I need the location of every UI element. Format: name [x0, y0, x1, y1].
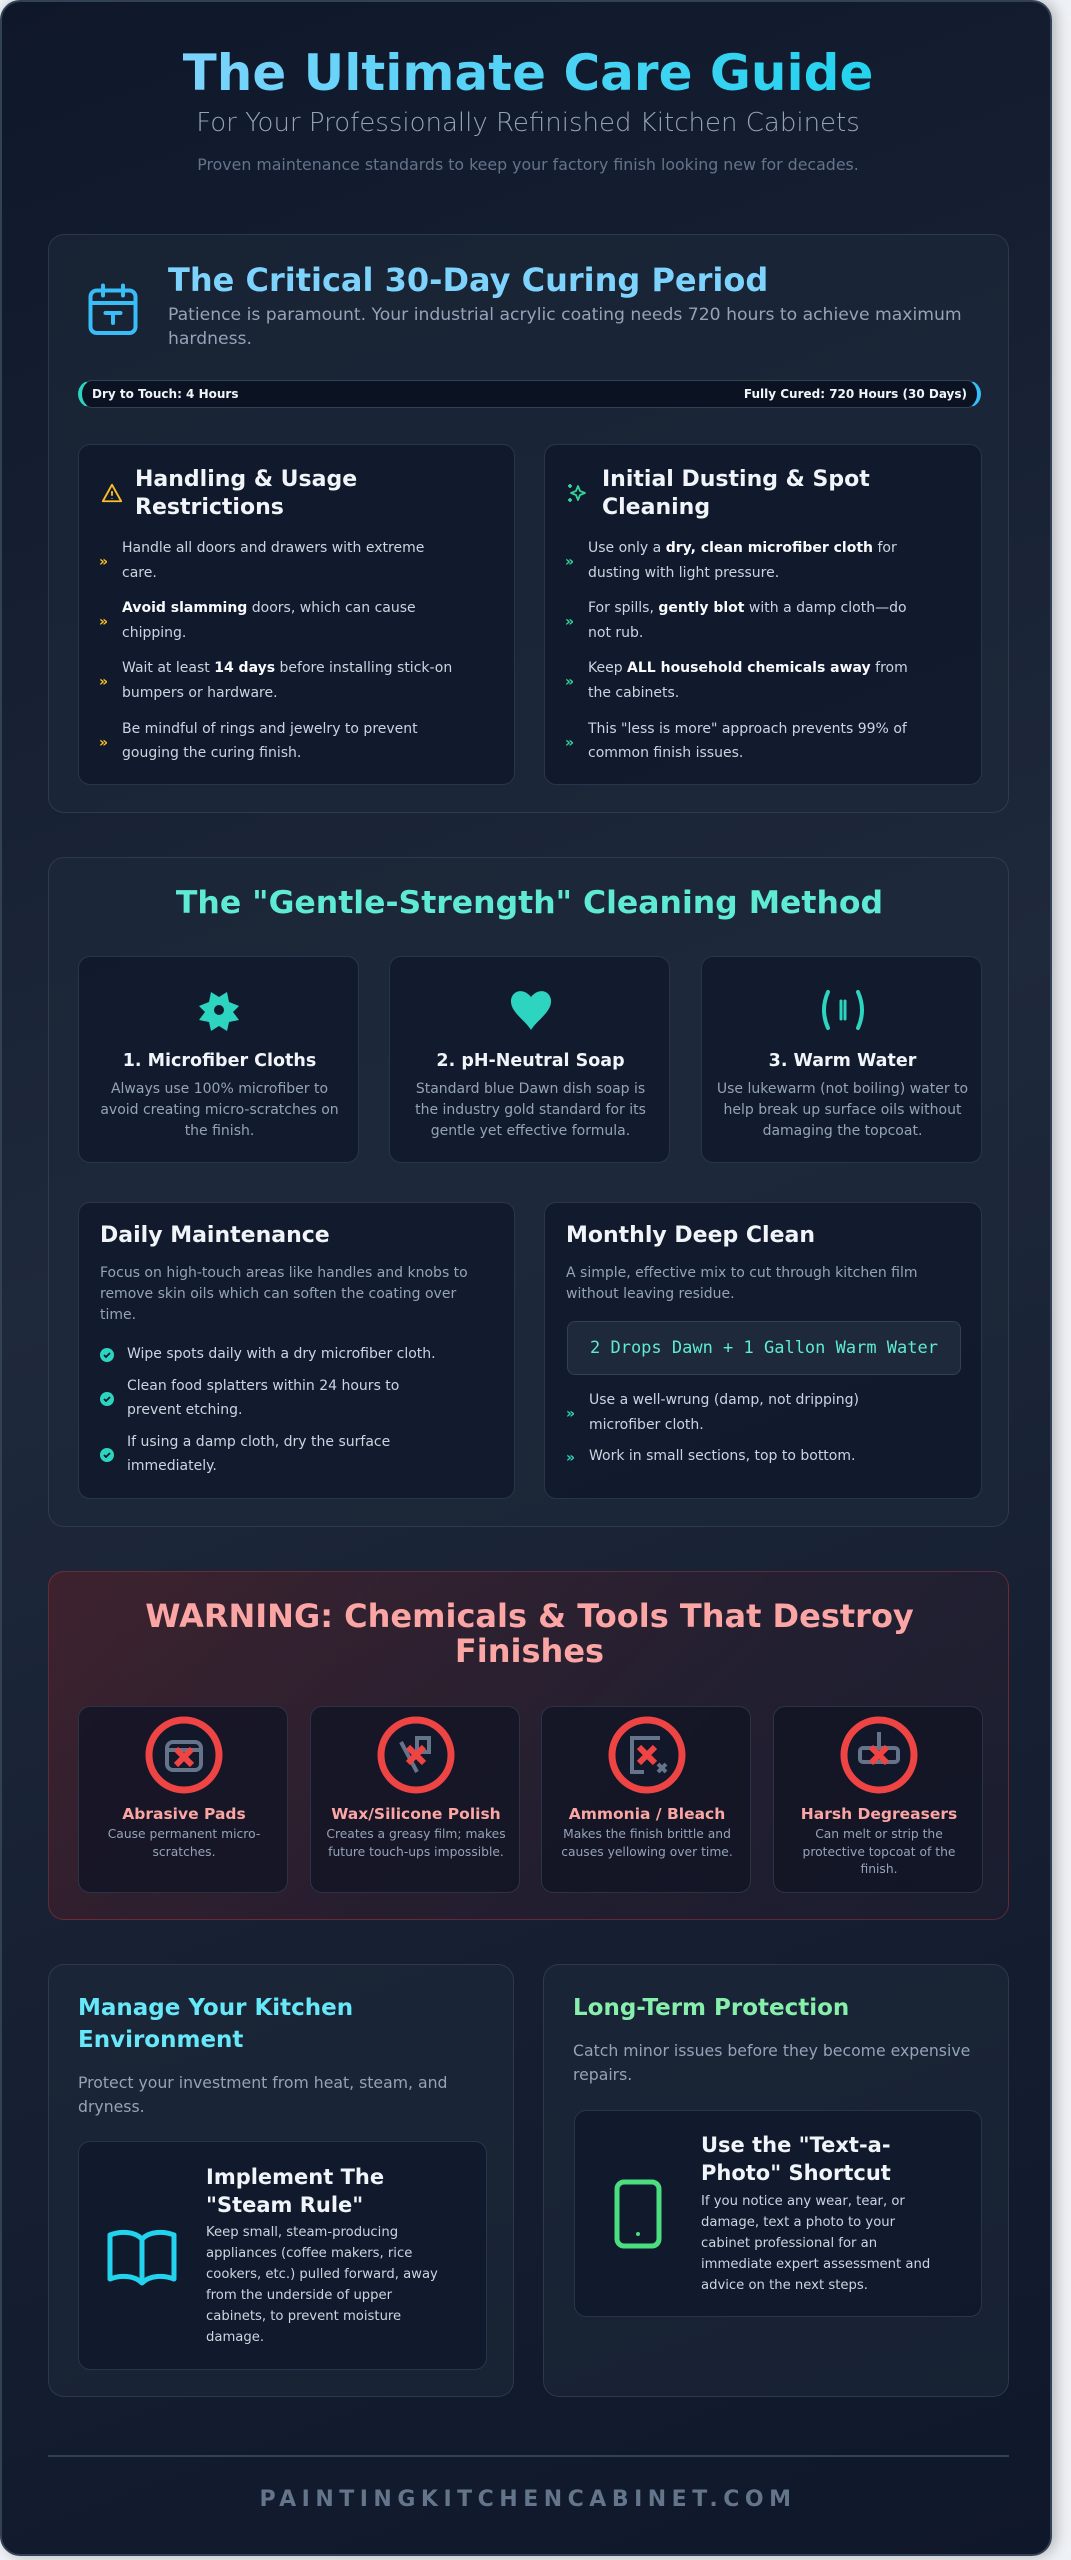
description [701, 2194, 930, 2293]
description: from the underside of upper [206, 2288, 392, 2303]
description: If you notice any wear, tear, or [701, 2194, 905, 2209]
bullet list: » [99, 735, 108, 751]
bullet list: microfiber cloth. [589, 1416, 704, 1432]
heading [135, 467, 357, 520]
title: 3. Warm Water [769, 1051, 916, 1071]
heading: The Critical 30-Day Curing Period [168, 261, 768, 299]
bullet list: bumpers or hardware. [122, 685, 278, 701]
description: damage, text a photo to your [701, 2215, 895, 2230]
checklist: prevent etching. [127, 1402, 242, 1418]
card: abrasive pads [78, 1706, 288, 1893]
heading: WARNING: Chemicals & Tools That Destroy [145, 1597, 914, 1635]
icon: sparkle [568, 484, 586, 502]
card: water [701, 956, 982, 1163]
icon: calendar [88, 284, 138, 335]
description: immediate expert assessment and [701, 2257, 930, 2272]
description: time. [100, 1307, 136, 1323]
checklist: If using a damp cloth, dry the surface [127, 1434, 390, 1450]
card: microfiber [78, 956, 359, 1163]
title: Harsh Degreasers [801, 1805, 957, 1823]
icon: no pads [146, 1716, 222, 1794]
icon: no polish [378, 1716, 454, 1794]
heading [78, 1995, 353, 2053]
icon: warm water [822, 990, 864, 1030]
progress bar [78, 380, 981, 408]
checklist: immediately. [127, 1458, 217, 1474]
title: Ammonia / Bleach [569, 1805, 725, 1823]
bullet list: » [99, 554, 108, 570]
heading: Restrictions [135, 495, 284, 520]
bullet list: Use a well-wrung (damp, not dripping) [589, 1392, 859, 1408]
description [206, 2225, 438, 2345]
description: remove skin oils which can soften the coating over [100, 1286, 456, 1302]
progress bar: Dry to Touch: 4 Hours [92, 387, 238, 401]
card: soap [389, 956, 670, 1163]
description: cookers, etc.) pulled forward, away [206, 2267, 438, 2282]
icon: phone [614, 2180, 662, 2248]
heading: Environment [78, 2027, 243, 2053]
heading [145, 1597, 914, 1670]
description [100, 1265, 468, 1323]
tagline: Proven maintenance standards to keep your factory finish looking new for decades. [197, 155, 859, 174]
bullet list: common finish issues. [588, 745, 743, 761]
bullet list: This "less is more" approach prevents 99% of [588, 721, 907, 737]
card: daily maintenance [78, 1202, 515, 1499]
bullet list: » [566, 1406, 575, 1422]
title: 2. pH-Neutral Soap [436, 1051, 625, 1071]
icon: no degreaser [840, 1716, 918, 1794]
heading: Daily Maintenance [100, 1223, 330, 1248]
heading: Initial Dusting & Spot [602, 467, 870, 492]
panel: long-term protection [543, 1964, 1009, 2397]
title: Implement The [206, 2165, 384, 2189]
title: Wax/Silicone Polish [331, 1805, 501, 1823]
panel: curing period [48, 234, 1009, 813]
description: advice on the next steps. [701, 2278, 868, 2293]
icon: cloth [199, 992, 239, 1031]
heading: Manage Your Kitchen [78, 1995, 353, 2021]
bullet list: » [99, 614, 108, 630]
title: Abrasive Pads [122, 1805, 246, 1823]
icon: no chemicals [608, 1716, 686, 1794]
icon: book [108, 2230, 176, 2286]
description: Cause permanent micro-scratches. [108, 1827, 260, 1858]
bullet list: » [566, 1450, 575, 1466]
heading: Long-Term Protection [573, 1995, 849, 2021]
heading: The "Gentle-Strength" Cleaning Method [176, 885, 883, 921]
description: Protect your investment from heat, steam, and dryness. [78, 2073, 447, 2116]
title [206, 2165, 384, 2217]
checklist: Wipe spots daily with a dry microfiber cloth. [127, 1346, 436, 1362]
description: Makes the finish brittle and causes yellowing over time. [561, 1827, 733, 1858]
description: A simple, effective mix to cut through kitchen film [566, 1265, 918, 1281]
bullet list: not rub. [588, 625, 643, 641]
bullet list [99, 540, 452, 761]
footer: PAINTINGKITCHENCABINET.COM [260, 2487, 796, 2512]
description: Can melt or strip the protective topcoat of the finish. [803, 1827, 955, 1876]
description: appliances (coffee makers, rice [206, 2246, 412, 2261]
bullet list: care. [122, 565, 157, 581]
description: Patience is paramount. Your industrial acrylic coating needs 720 hours to achieve maximum hardness. [168, 305, 962, 349]
bullet list: Use only a dry, clean microfiber cloth for [588, 540, 897, 556]
card: steam rule [78, 2141, 487, 2370]
card: ammonia bleach [541, 1706, 751, 1893]
bullet list: » [565, 674, 574, 690]
heading [602, 467, 870, 520]
description: Always use 100% microfiber to avoid creating micro-scratches on the finish. [100, 1081, 339, 1139]
bullet list: Handle all doors and drawers with extreme [122, 540, 424, 556]
panel: kitchen environment [48, 1964, 514, 2397]
heading: Monthly Deep Clean [566, 1223, 815, 1248]
bullet list: » [565, 554, 574, 570]
bullet list: » [99, 674, 108, 690]
panel: warning [48, 1571, 1009, 1920]
card: handling restrictions [78, 444, 515, 785]
bullet list: chipping. [122, 625, 186, 641]
checklist [100, 1346, 436, 1474]
bullet list: dusting with light pressure. [588, 565, 779, 581]
description: Catch minor issues before they become expensive repairs. [573, 2041, 970, 2084]
description [566, 1265, 918, 1302]
title: Use the "Text-a- [701, 2133, 891, 2157]
title: "Steam Rule" [206, 2193, 363, 2217]
card: initial dusting [544, 444, 982, 785]
title [701, 2133, 891, 2185]
heading: Handling & Usage [135, 467, 357, 492]
bullet list: For spills, gently blot with a damp cloth—do [588, 600, 907, 616]
card: degreasers [773, 1706, 983, 1893]
bullet list: Be mindful of rings and jewelry to prevent [122, 721, 418, 737]
bullet list: gouging the curing finish. [122, 745, 301, 761]
bullet list: Keep ALL household chemicals away from [588, 660, 908, 676]
heading: Cleaning [602, 495, 710, 520]
description: Standard blue Dawn dish soap is the industry gold standard for its gentle yet effective formula. [415, 1081, 646, 1139]
bullet list [565, 540, 908, 761]
description: cabinet professional for an [701, 2236, 877, 2251]
description: cabinets, to prevent moisture [206, 2309, 401, 2324]
title: The Ultimate Care Guide [183, 44, 873, 102]
bullet list [566, 1392, 859, 1466]
icon: warning [102, 484, 122, 502]
description: damage. [206, 2330, 264, 2345]
bullet list: the cabinets. [588, 685, 679, 701]
description: Focus on high-touch areas like handles and knobs to [100, 1265, 468, 1281]
bullet list: Work in small sections, top to bottom. [589, 1448, 855, 1464]
title: 1. Microfiber Cloths [123, 1051, 316, 1071]
bullet list: » [565, 735, 574, 751]
checklist: Clean food splatters within 24 hours to [127, 1378, 399, 1394]
progress bar: Fully Cured: 720 Hours (30 Days) [744, 387, 967, 401]
formula box: 2 Drops Dawn + 1 Gallon Warm Water [590, 1338, 938, 1358]
panel: cleaning method [48, 857, 1009, 1527]
bullet list: Avoid slamming doors, which can cause [122, 600, 416, 616]
bullet list: » [565, 614, 574, 630]
card: monthly deep clean [544, 1202, 982, 1499]
subtitle: For Your Professionally Refinished Kitchen Cabinets [196, 108, 860, 138]
description: Creates a greasy film; makes future touch-ups impossible. [326, 1827, 506, 1858]
description: Use lukewarm (not boiling) water to help break up surface oils without damaging the topcoat. [717, 1081, 968, 1139]
heading: Finishes [455, 1632, 604, 1670]
bullet list: Wait at least 14 days before installing stick-on [122, 660, 452, 676]
icon: heart [510, 991, 552, 1030]
card: wax polish [310, 1706, 520, 1893]
description: without leaving residue. [566, 1286, 735, 1302]
description: Keep small, steam-producing [206, 2225, 398, 2240]
formula box [567, 1321, 961, 1375]
card: text-a-photo [574, 2110, 982, 2317]
title: Photo" Shortcut [701, 2161, 891, 2185]
